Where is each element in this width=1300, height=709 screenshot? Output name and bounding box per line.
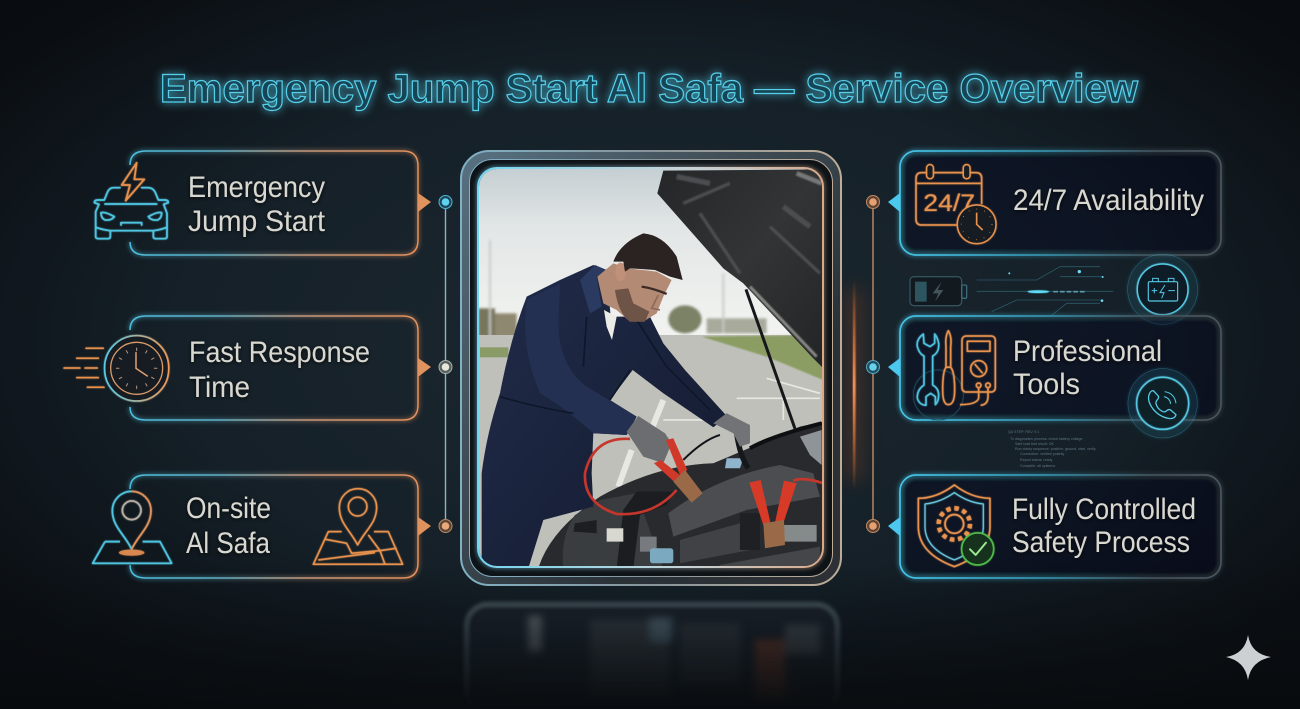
text: on-site al safa: On-site xyxy=(186,492,271,525)
gloved hands xyxy=(627,416,672,463)
text: professional tools: Tools xyxy=(1013,368,1080,401)
ear xyxy=(615,263,626,281)
icon: stopwatch clock with speed lines xyxy=(64,336,169,401)
text: emergency jump start: Jump Start xyxy=(188,205,326,238)
brow and eye xyxy=(642,287,667,294)
open hood xyxy=(657,169,823,368)
text: on-site al safa: Al Safa xyxy=(186,527,270,560)
photo frame xyxy=(461,151,841,585)
faint code block: QA STEP: REV. 9.1 xyxy=(1008,430,1039,434)
text: 24/7 availability: 24/7 Availability xyxy=(1013,184,1204,217)
beard xyxy=(615,288,649,322)
icon: calendar with clock: 24/7 xyxy=(923,190,975,217)
road xyxy=(477,335,825,568)
icon: shield with gear and check xyxy=(918,485,994,567)
hood rim and cables xyxy=(683,435,720,460)
text: fast response time: Fast Response xyxy=(189,336,370,369)
hair xyxy=(613,233,683,280)
text: on-site al safa xyxy=(186,492,271,560)
panel: professional tools xyxy=(888,316,1221,439)
faint code block: Report status: ready xyxy=(1020,458,1053,462)
red jumper cable xyxy=(585,439,677,514)
faint code block: Tx diagnostics process: check battery voltage xyxy=(1010,437,1083,441)
text: emergency jump start xyxy=(188,171,326,238)
faint code block: Safe load test result: OK xyxy=(1015,442,1055,446)
sleeve highlight and folds xyxy=(525,283,637,435)
icon: calendar with clock xyxy=(916,165,996,244)
text: fast response time xyxy=(189,336,370,404)
icon: faded battery xyxy=(910,277,967,306)
circuit strip: battery and data lines xyxy=(910,253,1199,326)
panel: fast response time xyxy=(64,316,431,420)
panel: left connector rail xyxy=(439,196,452,532)
text: professional tools: Professional xyxy=(1013,335,1162,368)
neck and face xyxy=(597,263,672,322)
icon: sparkle watermark xyxy=(1226,635,1271,680)
text: fully controlled safety process: Safety Process xyxy=(1012,526,1190,559)
faint code block: Run clamp sequence: positive, ground, start, verify xyxy=(1015,447,1096,451)
faint code block: Connection: verified polarity xyxy=(1020,452,1065,456)
icon: screwdriver xyxy=(943,331,955,405)
road markings xyxy=(618,378,820,487)
engine bay base xyxy=(538,422,823,568)
distant trees xyxy=(478,240,767,340)
red clamp two xyxy=(749,480,797,548)
photo: mechanic jump-starting a car xyxy=(477,167,825,568)
icon: multimeter xyxy=(960,336,995,405)
panel: fully controlled safety process xyxy=(888,475,1221,578)
hood strut xyxy=(746,289,795,429)
white t-shirt xyxy=(604,310,617,340)
panel: on-site al safa xyxy=(93,475,431,578)
text: fast response time: Time xyxy=(189,371,250,404)
red clamp one xyxy=(654,438,703,503)
circuit lines xyxy=(977,267,1113,317)
faint code block xyxy=(1008,430,1096,468)
title: Emergency Jump Start Al Safa — Service Overview xyxy=(160,67,1139,111)
text: professional tools xyxy=(1013,335,1162,401)
text: fully controlled safety process xyxy=(1012,493,1196,559)
text: emergency jump start: Emergency xyxy=(188,171,325,204)
sky xyxy=(477,167,825,340)
icon: location pin on plane xyxy=(93,491,172,563)
panel: right connector rail xyxy=(866,196,880,532)
panel: emergency jump start xyxy=(94,151,431,255)
mechanic: legs and torso xyxy=(482,265,727,568)
reflection of frame xyxy=(466,604,838,709)
collar xyxy=(580,265,607,313)
icon: map with pin xyxy=(313,489,403,564)
icon: phone circle xyxy=(1127,367,1199,439)
faint code block: Complete: all systems xyxy=(1020,464,1055,468)
panel: 24/7 availability xyxy=(888,151,1221,255)
text: fully controlled safety process: Fully Controlled xyxy=(1012,493,1196,526)
engine covers xyxy=(668,465,820,537)
icon: car with lightning bolt xyxy=(94,163,168,239)
grass xyxy=(702,335,823,380)
icon: wrench xyxy=(913,334,963,420)
icon: battery circle xyxy=(1126,253,1199,326)
left fender xyxy=(563,493,663,568)
nose shadow xyxy=(652,295,660,310)
